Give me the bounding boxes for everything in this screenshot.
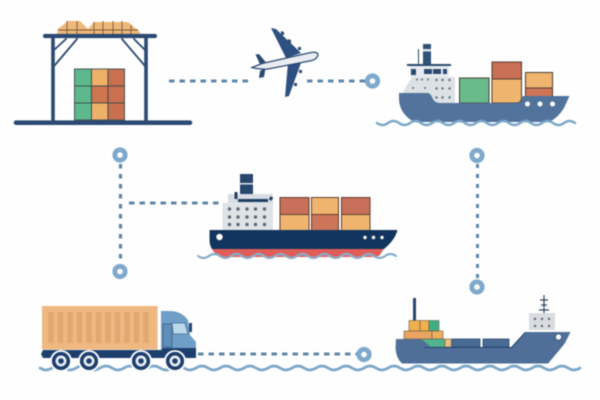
red lower hull xyxy=(211,247,385,257)
mirror xyxy=(189,323,192,332)
chassis xyxy=(41,348,196,358)
cab window xyxy=(172,323,188,334)
crane frame xyxy=(45,36,155,120)
portholes xyxy=(228,207,266,226)
cab door xyxy=(163,324,172,347)
icon: container ship, top right xyxy=(377,44,575,125)
navy hull xyxy=(210,230,398,249)
node: right lower xyxy=(472,282,482,292)
fuselage xyxy=(252,52,318,69)
bottom waves xyxy=(40,366,580,370)
icon: cargo ship, bottom right xyxy=(396,295,570,364)
hull lights xyxy=(216,234,384,240)
tail fins xyxy=(256,54,266,78)
bridge windows xyxy=(411,69,447,75)
hatch covers xyxy=(452,339,480,347)
mast xyxy=(539,295,549,313)
icon: airplane xyxy=(252,28,318,97)
funnel xyxy=(240,174,253,194)
container ribs xyxy=(51,312,146,343)
portholes xyxy=(412,78,451,99)
waves xyxy=(198,254,396,258)
deck line xyxy=(424,332,525,348)
wings xyxy=(271,28,302,97)
bridge xyxy=(410,66,449,77)
node: bottom xyxy=(359,349,369,360)
containers xyxy=(280,198,370,230)
node: top right xyxy=(367,76,378,86)
icon: container truck xyxy=(41,306,196,371)
node: left upper xyxy=(115,150,125,160)
bow portholes xyxy=(525,102,555,106)
crane cargo xyxy=(57,21,140,35)
node: left lower xyxy=(115,266,125,277)
connector: crane to plane to ship xyxy=(169,80,366,82)
funnel xyxy=(423,44,431,64)
wheels xyxy=(51,351,185,371)
connector: left vertical xyxy=(119,164,122,264)
ground bar xyxy=(16,120,190,125)
icon: container ship, centre xyxy=(198,174,398,258)
superstructure xyxy=(222,203,273,230)
hawse hole xyxy=(556,334,562,340)
containers xyxy=(460,62,552,103)
mast xyxy=(418,49,420,65)
hull xyxy=(396,332,570,364)
stacked containers xyxy=(74,69,124,120)
hull xyxy=(399,93,570,122)
node: right upper xyxy=(472,150,482,161)
bridge xyxy=(228,194,273,203)
engines xyxy=(281,31,302,86)
superstructure xyxy=(529,313,555,330)
cab xyxy=(161,311,196,352)
container body xyxy=(42,306,158,350)
windows xyxy=(534,318,550,327)
superstructure xyxy=(403,77,455,104)
cargo stack xyxy=(404,320,451,347)
icon: port crane with containers xyxy=(16,21,190,123)
funnel xyxy=(413,298,416,321)
connector: truck to ship xyxy=(198,352,358,356)
waves xyxy=(377,121,575,125)
connector: right vertical xyxy=(476,164,479,280)
connector: left branch to ship xyxy=(129,202,219,204)
